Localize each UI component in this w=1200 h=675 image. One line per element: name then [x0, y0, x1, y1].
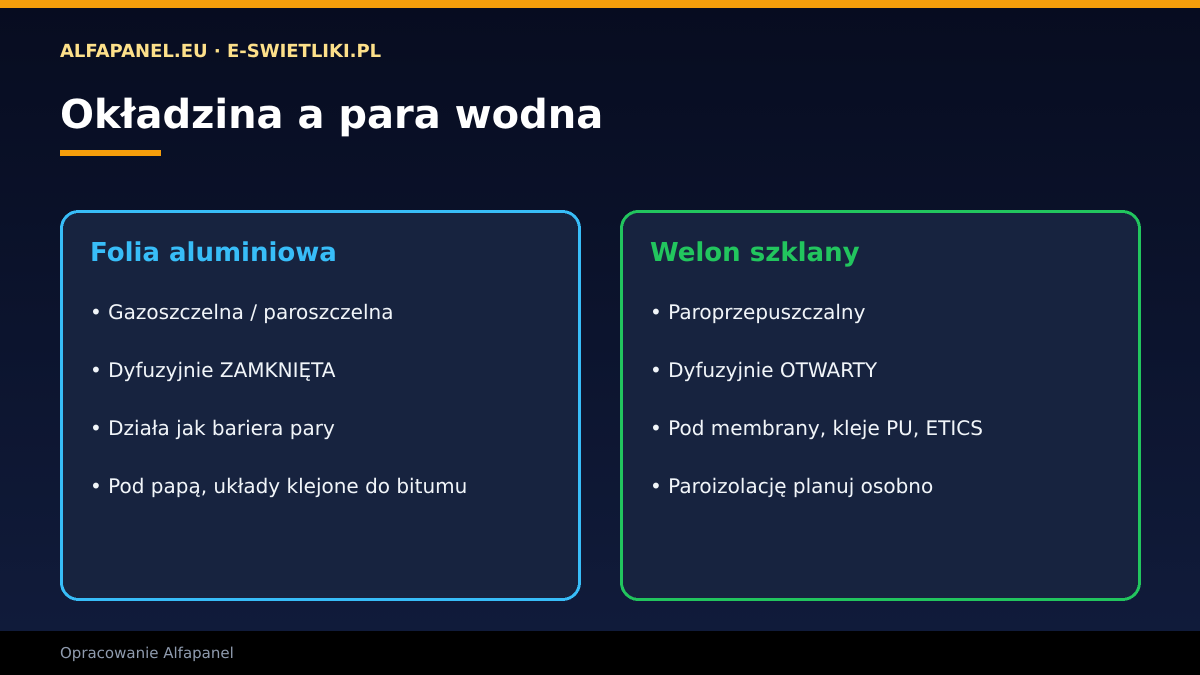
title underline [60, 150, 161, 156]
footer bar [0, 631, 1200, 675]
top accent bar [0, 0, 1200, 8]
panel: Folia aluminiowa [60, 210, 581, 601]
list item: • Paroprzepuszczalny [650, 300, 865, 324]
list item: • Dyfuzyjnie ZAMKNIĘTA [90, 358, 336, 382]
brand line: ALFAPANEL.EU · E-SWIETLIKI.PL [60, 41, 381, 62]
list item: • Działa jak bariera pary [90, 416, 335, 440]
panel heading: Welon szklany [650, 238, 860, 268]
panel: Welon szklany [620, 210, 1141, 601]
list item: • Pod membrany, kleje PU, ETICS [650, 416, 983, 440]
footer text: Opracowanie Alfapanel [60, 644, 234, 662]
list item: • Dyfuzyjnie OTWARTY [650, 358, 877, 382]
list item: • Gazoszczelna / paroszczelna [90, 300, 393, 324]
list item: • Paroizolację planuj osobno [650, 474, 933, 498]
panel heading: Folia aluminiowa [90, 238, 337, 268]
title: Okładzina a para wodna [60, 92, 603, 138]
list item: • Pod papą, układy klejone do bitumu [90, 474, 467, 498]
